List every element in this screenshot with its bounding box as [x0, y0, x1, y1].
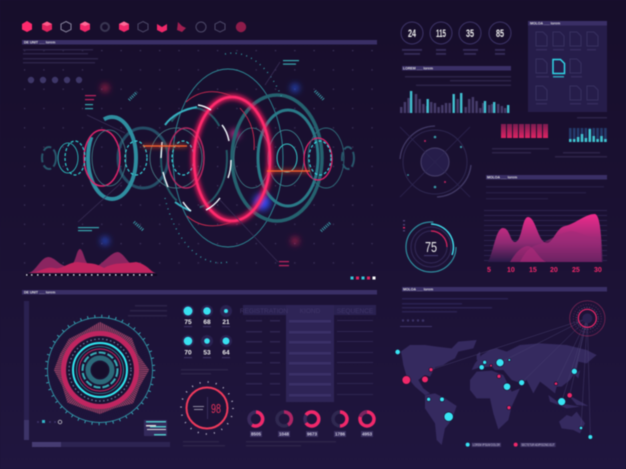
- donut charts: 4953: [362, 432, 373, 437]
- gauge 98: 98: [211, 401, 221, 416]
- status dots: [28, 77, 82, 83]
- panel: world map: [395, 287, 607, 447]
- axis labels: [487, 267, 602, 274]
- hatch marks: [129, 91, 330, 231]
- donut charts: 1786: [335, 432, 346, 437]
- axis labels: 25: [572, 267, 580, 274]
- data table: SEQUENCE: [337, 308, 374, 315]
- area chart small: [25, 249, 157, 276]
- axis labels: 20: [550, 267, 558, 274]
- icon row: [22, 21, 246, 32]
- panel: radial scanner: [22, 290, 377, 447]
- mini table: [144, 420, 167, 436]
- axis labels: 10: [507, 267, 515, 274]
- cyan markers: [395, 349, 593, 439]
- pink markers: [402, 364, 572, 410]
- heading: area section: [486, 175, 607, 200]
- number stats: 85: [496, 28, 504, 40]
- file panel: [528, 21, 607, 118]
- dot stats: [181, 305, 232, 374]
- axis labels: 30: [594, 267, 602, 274]
- heading bar: [22, 40, 377, 44]
- intro text: [23, 49, 98, 64]
- heading bar: DE UNIT ___ lorem: [24, 40, 55, 44]
- dot stats: 64: [222, 350, 230, 356]
- area chart large: [484, 210, 607, 262]
- map legend: [466, 443, 556, 447]
- dial: [46, 316, 154, 424]
- donut charts: [246, 412, 374, 446]
- heading: area section: MOLOA ___ lorem: [487, 176, 517, 180]
- axis labels: 5: [487, 267, 491, 274]
- panel: radial scanner: DE UNIT ___ lorem: [24, 291, 55, 295]
- map legend: LOREM IPSUM DOLOR: [473, 443, 500, 447]
- dot stats: 75: [184, 319, 192, 326]
- data table: REGISTRATION: [240, 308, 288, 315]
- gauge 75: [403, 220, 456, 272]
- dot stats: 68: [203, 319, 211, 326]
- dot stats: 21: [222, 319, 230, 326]
- gauge 98: [181, 382, 233, 446]
- bar chart panel: [400, 66, 511, 113]
- legend squares: [350, 276, 376, 280]
- panel: main hologram: [22, 21, 377, 280]
- donut charts: 9673: [307, 432, 318, 437]
- data table: [240, 305, 376, 402]
- data table: KIOND: [300, 308, 321, 315]
- gauge 75: 75: [425, 239, 437, 256]
- teal bars: [555, 128, 607, 158]
- map legend: SECTETUR ADIPISCING ELIT: [521, 443, 555, 447]
- glow lights: [102, 84, 298, 244]
- file panel: MOLOA ___ lorem: [530, 22, 560, 26]
- hologram labels: [78, 60, 299, 266]
- number stats: [401, 22, 511, 55]
- donut charts: 8505: [251, 432, 262, 437]
- panel: world map: MOLOA ___ lorem: [403, 288, 433, 292]
- continents: [401, 340, 597, 445]
- number stats: 24: [408, 28, 417, 40]
- number stats: 115: [436, 28, 446, 40]
- number stats: 35: [466, 28, 474, 40]
- radar: [400, 126, 471, 197]
- dial controls: [37, 420, 62, 424]
- connection lines: [431, 318, 590, 437]
- axis labels: 15: [529, 267, 537, 274]
- dot stats: 53: [203, 350, 211, 356]
- dot grid: [22, 48, 377, 280]
- dot stats: 70: [184, 350, 192, 356]
- hologram rings: [42, 53, 354, 263]
- target: [570, 301, 605, 336]
- bar chart panel: LOREM ___ lorem: [403, 66, 433, 70]
- donut charts: 1048: [279, 432, 290, 437]
- pink bars: [492, 124, 549, 154]
